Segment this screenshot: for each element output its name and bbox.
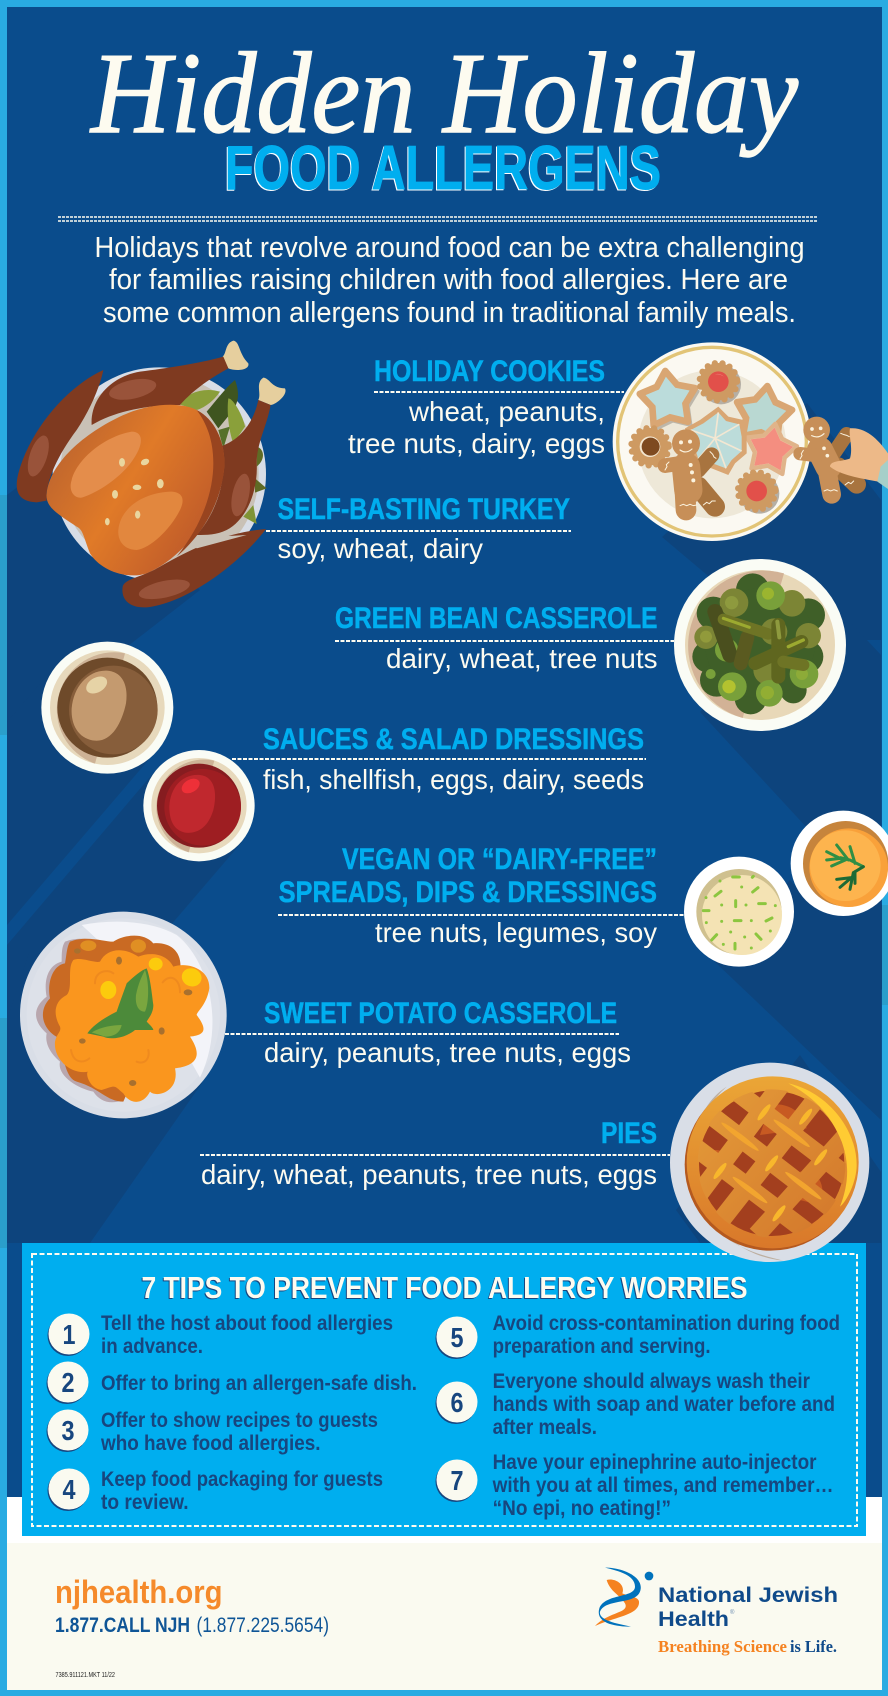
snowflake cookie [685,407,747,475]
food item: sauces and salad dressings label: fish, shellfish, eggs, dairy, seeds [263,764,644,795]
intro paragraph: Holidays that revolve around food can be extra challenging [94,232,804,264]
tip 7: 7 [450,1465,464,1496]
food item: self-basting turkey label: soy, wheat, dairy [278,533,483,564]
food item: sweet potato casserole label [225,997,631,1068]
gingerbread in hand [800,417,857,494]
tip 3: Offer to show recipes to guests [101,1409,378,1432]
tip 7: “No epi, no eating!” [493,1497,671,1520]
tip 2 [46,1362,417,1404]
title subtitle: FOOD ALLERGENS [225,134,661,203]
tip 1: in advance. [101,1335,203,1358]
blue star cookie [638,368,701,430]
logo [595,1568,838,1656]
logo: Breathing Science [658,1637,787,1656]
food item: vegan spreads label: tree nuts, legumes, soy [375,917,657,948]
food item: self-basting turkey label: SELF-BASTING TURKEY [278,493,570,526]
tips heading: 7 TIPS TO PREVENT FOOD ALLERGY WORRIES [142,1270,748,1305]
title [89,30,798,203]
tip 2: Offer to bring an allergen-safe dish. [101,1372,417,1395]
icon: lattice pie [670,1063,869,1262]
intro paragraph: for families raising children with food allergies. Here are [109,264,788,296]
food item: self-basting turkey label [266,493,571,564]
tip 5 [436,1312,840,1359]
icon: cookie plate with gingerbread [613,342,888,541]
tip 4 [48,1468,383,1514]
round jam cookie bottom [738,472,779,514]
tip 6 [436,1370,835,1439]
food item: pies label: dairy, wheat, peanuts, tree nuts, eggs [201,1159,657,1190]
round chocolate cookie [631,428,669,465]
icon: roast turkey [17,341,286,607]
logo: is Life. [790,1637,837,1656]
intro paragraph [94,232,804,329]
blue star cookie two [732,382,795,442]
tip 1 [48,1312,393,1358]
icon: red sauce bowl [143,750,255,861]
tip 6: after meals. [493,1416,597,1439]
title script line: Hidden Holiday [89,30,798,158]
tip 5: Avoid cross-contamination during food [493,1312,840,1335]
footer phone [55,1614,329,1637]
food item: green bean casserole label [335,602,674,674]
food item: sweet potato casserole label: SWEET POTATO CASSEROLE [264,997,617,1030]
food item: vegan spreads label [278,843,684,948]
icon: sweet potato casserole plate [20,912,227,1118]
food item: holiday cookies label [348,355,624,459]
food item: green bean casserole label: dairy, wheat, tree nuts [386,643,658,674]
tip 2: 2 [62,1367,74,1398]
hand and sleeve [830,428,888,489]
icon: green bean casserole bowl [674,559,846,731]
tip 7: Have your epinephrine auto-injector [493,1451,816,1474]
tip 3: who have food allergies. [100,1432,320,1455]
footer phone: 1.877.CALL NJH [55,1614,190,1637]
tip 6: 6 [450,1387,464,1418]
tip 7 [436,1451,834,1520]
tip 4: 4 [62,1474,76,1505]
tip 7: with you at all times, and remember… [492,1474,834,1497]
tip 1: Tell the host about food allergies [101,1312,393,1335]
food item: green bean casserole label: GREEN BEAN CASSEROLE [335,602,658,635]
footer code: 7385.911121.MKT 11/22 [56,1672,115,1679]
logo icon [595,1568,653,1627]
tip 4: Keep food packaging for guests [101,1468,383,1491]
gingerbread on plate [665,429,716,510]
food item: vegan spreads label: VEGAN OR “DAIRY-FREE” [342,843,657,876]
tip 3: 3 [62,1415,74,1446]
icon: creamy dip bowl [684,857,794,967]
food item: sweet potato casserole label: dairy, peanuts, tree nuts, eggs [264,1037,631,1068]
intro paragraph: some common allergens found in traditional family meals. [103,297,796,329]
food item: holiday cookies label: HOLIDAY COOKIES [374,355,605,388]
logo: Health [658,1608,729,1631]
tip 5: preparation and serving. [493,1335,711,1358]
tip 1: 1 [62,1319,76,1350]
icon: orange soup bowl [791,811,888,916]
logo: National Jewish [658,1584,838,1607]
tip 6: Everyone should always wash their [493,1370,810,1393]
logo: ® [730,1609,735,1616]
tip 4: to review. [101,1491,189,1514]
food item: pies label: PIES [601,1117,657,1150]
tips panel [22,1243,866,1536]
food item: pies label [200,1117,670,1190]
icon: gravy bowl [41,642,173,774]
footer website: njhealth.org [55,1574,222,1610]
footer phone: (1.877.225.5654) [196,1614,329,1637]
food item: holiday cookies label: wheat, peanuts, [408,396,605,427]
food item: vegan spreads label: SPREADS, DIPS & DRESSINGS [279,876,657,909]
pink star cookie [742,419,800,476]
food item: holiday cookies label: tree nuts, dairy, eggs [348,428,605,459]
tip 3 [46,1409,378,1455]
tip 6: hands with soap and water before and [493,1393,835,1416]
food item: sauces and salad dressings label: SAUCES & SALAD DRESSINGS [263,723,644,756]
tip 5: 5 [450,1322,464,1353]
food item: sauces and salad dressings label [232,723,646,795]
round jam cookie top [700,363,741,404]
